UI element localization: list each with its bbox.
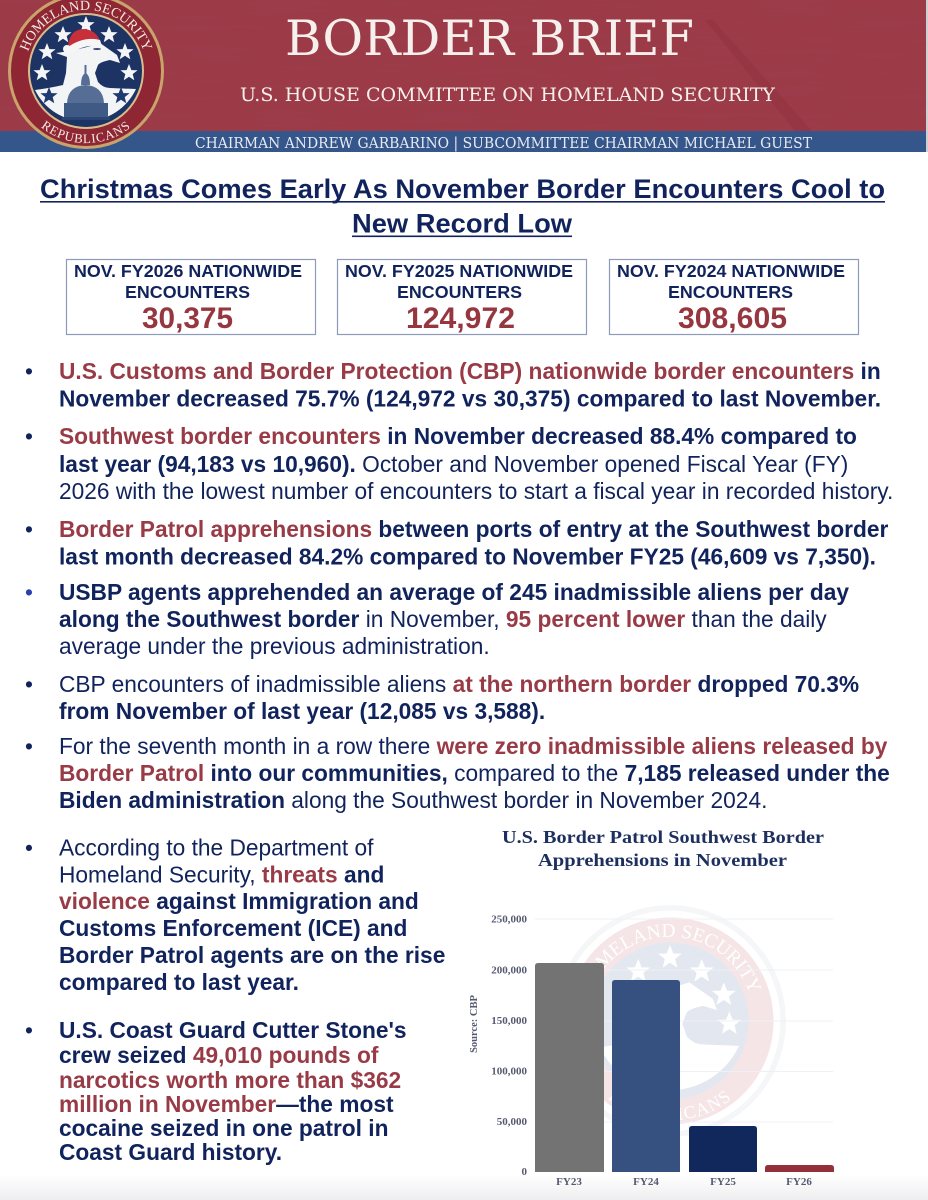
bullet: USBP daily average: USBP agents apprehended an average of 245 inadmissible aliens per day: [59, 579, 849, 605]
capitol dome: [62, 65, 110, 120]
bullet: northern border: CBP encounters of inadmissible aliens at the northern border dropped 70.3%: [59, 671, 859, 697]
title: New Record Low: [352, 208, 573, 238]
icon: Homeland Security Republicans seal: [8, 0, 164, 149]
y axis labels: 150,000: [491, 1015, 528, 1027]
bullet: nationwide encounters: November decreased 75.7% (124,972 vs 30,375) compared to last November.: [59, 386, 881, 412]
bullet: Border Patrol apprehensions: [25, 516, 889, 570]
banner subtitle: U.S. HOUSE COMMITTEE ON HOMELAND SECURITY: [240, 84, 775, 106]
eagle and snow ground: [35, 43, 136, 121]
stat box: FY2024: NOV. FY2024 NATIONWIDE: [617, 261, 845, 281]
seal lettering: HOMELAND SECURITY: [20, 0, 152, 52]
bullet: USBP daily average: along the Southwest border in November, 95 percent lower than the daily: [59, 606, 827, 632]
y axis labels: 0: [522, 1166, 528, 1178]
bullet: threats and violence: violence against Immigration and: [59, 888, 419, 914]
bullet: USBP daily average: [25, 579, 849, 659]
stat box: FY2024: [610, 260, 858, 335]
bullet: threats and violence: •: [25, 834, 33, 860]
title: [40, 173, 885, 238]
header banner: [0, 0, 928, 152]
stat box: FY2024: 308,605: [678, 302, 787, 335]
bullet: southwest border encounters: last year (94,183 vs 10,960). October and November opened Fiscal Year (FY): [59, 451, 848, 477]
bar: FY26: [765, 1165, 834, 1172]
banner title: BORDER BRIEF: [285, 10, 694, 67]
seal watermark: REPUBLICANS: [608, 1090, 730, 1120]
y axis labels: 200,000: [491, 964, 528, 976]
bullet: Border Patrol apprehensions: Border Patrol apprehensions between ports of entry at the Southwest border: [59, 516, 889, 542]
bullet: southwest border encounters: Southwest border encounters in November decreased 88.4% compared to: [59, 423, 857, 449]
bullet: Coast Guard seizure: cocaine seized in one patrol in: [59, 1115, 388, 1141]
stat box: FY2026: NOV. FY2026 NATIONWIDE: [74, 261, 302, 281]
bullet: Coast Guard seizure: [25, 1017, 406, 1165]
bullet: zero releases: For the seventh month in a row there were zero inadmissible aliens released by: [59, 733, 888, 759]
bullet: Border Patrol apprehensions: last month decreased 84.2% compared to November FY25 (46,609 vs 7,350).: [59, 544, 876, 570]
stat box: FY2026: 30,375: [142, 302, 233, 335]
icon: Homeland Security Republicans seal: REPUBLICANS: [41, 120, 130, 144]
x axis labels: [556, 1176, 812, 1188]
bullet: Coast Guard seizure: Coast Guard history.: [59, 1139, 282, 1165]
bullet: threats and violence: Customs Enforcement (ICE) and: [59, 915, 407, 941]
bullet: threats and violence: compared to last year.: [59, 969, 299, 995]
bullet: zero releases: Biden administration along the Southwest border in November 2024.: [59, 787, 767, 813]
bullet: threats and violence: According to the Department of: [59, 834, 374, 860]
chart title: Apprehensions in November: [538, 850, 787, 870]
x axis labels: FY24: [633, 1176, 659, 1188]
y axis labels: 100,000: [491, 1066, 528, 1078]
bar: FY23: [535, 963, 604, 1172]
bullet: nationwide encounters: U.S. Customs and Border Protection (CBP) nationwide border encounters in: [59, 358, 881, 384]
y axis labels: 50,000: [497, 1116, 528, 1128]
bullet: zero releases: [25, 733, 890, 813]
stat box: FY2025: ENCOUNTERS: [397, 282, 522, 302]
x axis labels: FY23: [556, 1176, 582, 1188]
seal watermark: HOMELAND SECURITY: [594, 924, 762, 990]
seal watermark: [570, 906, 786, 1136]
bullet: nationwide encounters: •: [25, 358, 33, 384]
bullet: northern border: [25, 671, 859, 724]
blue chairman strip: CHAIRMAN ANDREW GARBARINO | SUBCOMMITTEE CHAIRMAN MICHAEL GUEST: [195, 136, 812, 152]
bar: FY24: [612, 980, 680, 1172]
x axis labels: FY25: [710, 1176, 736, 1188]
stat box: FY2026: [66, 260, 316, 335]
bullet: northern border: •: [25, 671, 33, 697]
bullet: threats and violence: Border Patrol agents are on the rise: [59, 942, 445, 968]
chart title: U.S. Border Patrol Southwest Border: [502, 827, 824, 847]
chart: apprehensions in November: [469, 827, 834, 1188]
bullet: zero releases: Border Patrol into our communities, compared to the 7,185 released under the: [59, 760, 890, 786]
bullet: Coast Guard seizure: narcotics worth more than $362: [59, 1067, 401, 1093]
bullet: southwest border encounters: •: [25, 423, 33, 449]
stat box: FY2025: NOV. FY2025 NATIONWIDE: [345, 261, 573, 281]
bullet: Coast Guard seizure: •: [25, 1017, 33, 1043]
blue chairman strip: [0, 131, 926, 152]
bullet: USBP daily average: •: [25, 579, 33, 605]
stat box: FY2025: [338, 260, 586, 335]
y axis labels: 250,000: [491, 914, 528, 926]
bullet: threats and violence: [25, 834, 445, 995]
bullet: nationwide encounters: [25, 358, 881, 412]
bar: FY25: [689, 1126, 757, 1172]
bullet: southwest border encounters: 2026 with the lowest number of encounters to start a fiscal year in recorded history.: [59, 478, 893, 504]
bullet: Coast Guard seizure: crew seized 49,010 pounds of: [59, 1042, 379, 1068]
stat box: FY2026: ENCOUNTERS: [125, 282, 250, 302]
title: Christmas Comes Early As November Border Encounters Cool to: [40, 173, 885, 204]
bullet: threats and violence: Homeland Security, threats and: [59, 862, 384, 888]
stat box: FY2024: ENCOUNTERS: [668, 282, 793, 302]
bullet: northern border: from November of last year (12,085 vs 3,588).: [59, 698, 545, 724]
bullet: zero releases: •: [25, 733, 33, 759]
bullet: southwest border encounters: [25, 423, 893, 504]
bullet: USBP daily average: average under the previous administration.: [59, 633, 490, 659]
chart title: [502, 827, 824, 870]
x axis labels: FY26: [786, 1176, 812, 1188]
bullet: Coast Guard seizure: U.S. Coast Guard Cutter Stone's: [59, 1017, 406, 1043]
y axis labels: [491, 914, 528, 1178]
bullet: Border Patrol apprehensions: •: [25, 516, 33, 542]
axis source label: Source: CBP: [469, 994, 480, 1053]
bullet: Coast Guard seizure: million in November—the most: [59, 1091, 394, 1117]
gridlines: [535, 919, 833, 1122]
santa hat: [63, 29, 102, 53]
stat box: FY2025: 124,972: [406, 302, 515, 335]
seal stars: [33, 16, 138, 80]
